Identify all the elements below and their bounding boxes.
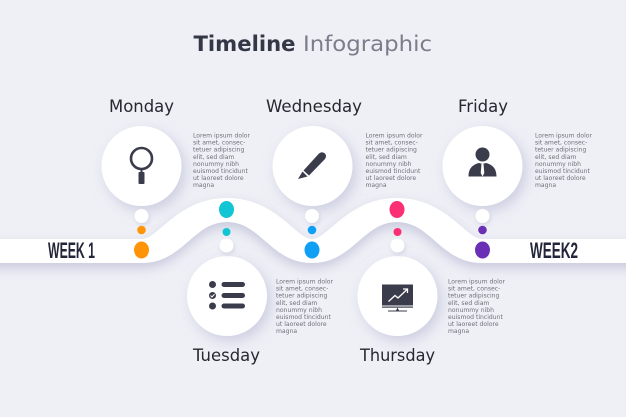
text: Monday description: sit amet, consec- — [193, 140, 245, 147]
connector dots: Wednesday — [304, 209, 320, 258]
text: Friday description: ut laoreet dolore — [535, 175, 586, 182]
connector dots: Tuesday — [219, 201, 234, 252]
connector dots: Friday — [475, 209, 490, 258]
heading: Thursday: Thursday — [359, 346, 435, 365]
text: Wednesday description: euismod tincidunt — [366, 168, 421, 175]
circle: Friday — [442, 126, 522, 206]
text: Friday description: tetuer adipiscing — [535, 147, 587, 154]
circle: Monday — [102, 126, 182, 206]
text: Monday description: nonummy nibh — [193, 161, 239, 168]
icon: monitor chart — [382, 284, 413, 312]
text: Thursday description: nonummy nibh — [448, 307, 494, 314]
text: Wednesday description: ut laoreet dolore — [366, 175, 416, 182]
connector dots: Monday — [134, 209, 149, 258]
text: Wednesday description: magna — [366, 182, 387, 189]
text: Tuesday description: sit amet, consec- — [276, 286, 328, 293]
text: Monday description: tetuer adipiscing — [193, 147, 245, 154]
heading: Monday: Monday — [109, 97, 174, 116]
text: Wednesday description: elit, sed diam — [366, 154, 407, 161]
step: Friday — [442, 97, 592, 258]
heading: Friday: Friday — [458, 97, 508, 116]
text: Wednesday description: nonummy nibh — [366, 161, 412, 168]
label: week 2: WEEK2 — [530, 238, 578, 263]
icon: pencil — [298, 152, 326, 179]
text: Wednesday description: tetuer adipiscing — [366, 147, 417, 154]
text: Tuesday description: Lorem ipsum dolor — [276, 278, 333, 286]
text: Thursday description: magna — [448, 328, 469, 335]
text: Thursday description: sit amet, consec- — [448, 286, 500, 293]
timeline ribbon — [0, 198, 626, 263]
text: Wednesday description: Lorem ipsum dolor — [366, 132, 423, 140]
icon: magnifying glass — [131, 148, 152, 184]
text: Friday description: Lorem ipsum dolor — [535, 132, 592, 140]
text: Tuesday description: tetuer adipiscing — [276, 293, 328, 300]
title: Infographic — [303, 32, 432, 57]
title: Timeline — [194, 32, 296, 57]
label: week 1: WEEK 1 — [48, 238, 95, 263]
text: Wednesday description: sit amet, consec- — [366, 140, 418, 147]
text: Tuesday description: elit, sed diam — [276, 300, 317, 307]
circle: Wednesday — [272, 126, 352, 206]
connector dots: Thursday — [390, 201, 404, 252]
heading: Tuesday: Tuesday — [192, 346, 260, 365]
title — [194, 32, 432, 57]
text: Friday description: euismod tincidunt — [535, 168, 591, 175]
text: Tuesday description: euismod tincidunt — [276, 314, 332, 321]
text: Tuesday description: ut laoreet dolore — [276, 321, 327, 328]
text: Monday description: elit, sed diam — [193, 154, 234, 161]
text: Tuesday description: magna — [276, 328, 297, 335]
text: Thursday description: euismod tincidunt — [448, 314, 504, 321]
circle: Tuesday — [187, 256, 267, 336]
heading: Wednesday: Wednesday — [266, 97, 362, 116]
circle: Thursday — [358, 256, 438, 336]
text: Thursday description: elit, sed diam — [448, 300, 489, 307]
step: Monday — [102, 97, 250, 258]
text: Monday description: ut laoreet dolore — [193, 175, 244, 182]
text: Friday description: elit, sed diam — [535, 154, 576, 161]
text: Tuesday description: nonummy nibh — [276, 307, 322, 314]
text: Monday description: euismod tincidunt — [193, 168, 249, 175]
step: Thursday — [358, 201, 505, 365]
text: Monday description: magna — [193, 182, 214, 189]
text: Monday description: Lorem ipsum dolor — [193, 132, 250, 140]
text: Friday description: nonummy nibh — [535, 161, 581, 168]
text: Friday description: sit amet, consec- — [535, 140, 587, 147]
step: Tuesday — [187, 201, 333, 365]
text: Thursday description: ut laoreet dolore — [448, 321, 499, 328]
text: Thursday description: tetuer adipiscing — [448, 293, 500, 300]
text: Friday description: magna — [535, 182, 556, 189]
icon: checklist — [209, 281, 245, 310]
icon: businessman — [468, 148, 496, 176]
step: Wednesday — [266, 97, 423, 258]
text: Thursday description: Lorem ipsum dolor — [448, 278, 505, 286]
